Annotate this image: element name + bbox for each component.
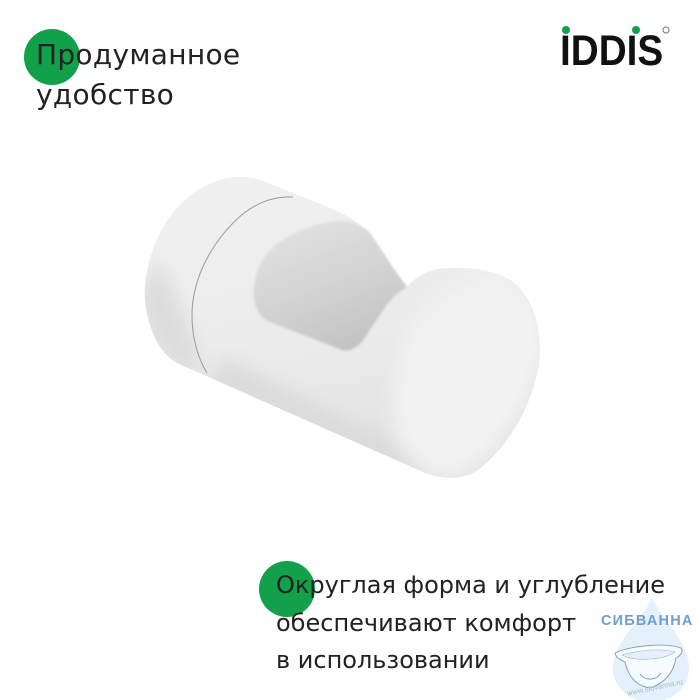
soft shading — [140, 260, 545, 482]
caption: в использовании — [276, 646, 490, 674]
watermark tub — [615, 645, 682, 688]
watermark drop — [613, 597, 689, 700]
hook silhouette — [145, 177, 540, 478]
caption marker circle — [259, 561, 315, 617]
hook recess — [254, 221, 407, 351]
logo text: IDDIS — [560, 27, 663, 75]
heading marker circle — [24, 29, 80, 85]
heading: Продуманное — [36, 38, 240, 71]
brand logo — [560, 26, 670, 75]
watermark smile — [640, 673, 661, 679]
watermark url: www.sibvanna.ru — [625, 677, 684, 698]
caption: Округлая форма и углубление — [276, 571, 665, 599]
watermark text: СИБВАННА — [601, 613, 694, 629]
product illustration: white hook — [144, 177, 540, 478]
watermark: Сибванна — [601, 598, 694, 700]
seam — [192, 197, 293, 373]
logo dots — [562, 26, 670, 34]
heading: удобство — [36, 78, 174, 111]
watermark tub rim — [622, 650, 675, 659]
caption: обеспечивают комфорт — [276, 608, 576, 636]
heading — [36, 38, 240, 111]
caption — [276, 571, 665, 674]
